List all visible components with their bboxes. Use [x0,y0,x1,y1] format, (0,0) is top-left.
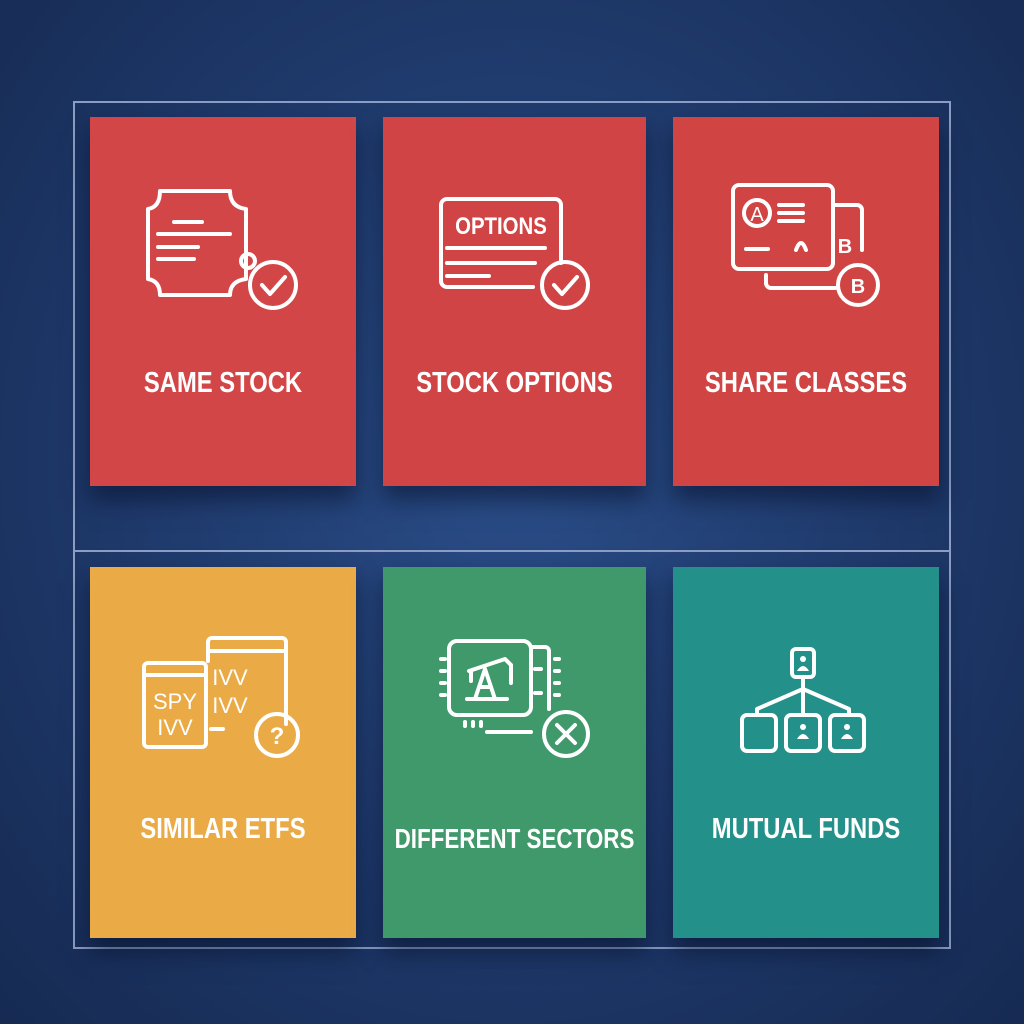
card: stock options [383,117,646,486]
icon: etf windows: IVV [212,693,248,718]
icon: options doc: OPTIONS [455,212,547,239]
icon: share classes A B: B [838,236,852,258]
icon: etf windows: IVV [212,665,248,690]
card: different sectors [383,567,646,938]
label: SHARE CLASSES [705,367,907,399]
icon: options doc [439,197,590,310]
icon: etf windows: ? [270,723,284,750]
icon: share classes A B: A [750,204,764,226]
label: MUTUAL FUNDS [712,813,900,845]
card: mutual funds [673,567,939,938]
frame [73,101,951,949]
card: similar etfs [90,567,356,938]
card: share classes [673,117,939,486]
icon: share classes A B: B [851,276,865,298]
icon: etf windows: SPY [153,689,197,714]
label: SIMILAR ETFS [140,813,306,845]
icon: share classes A B [731,183,880,307]
icon: chip with oil pump and x [439,639,590,758]
icon: etf windows: IVV [157,715,193,740]
label: SAME STOCK [144,367,302,399]
label: DIFFERENT SECTORS [395,823,634,854]
icon: org tree [740,647,866,753]
icon: certificate with check [146,189,298,310]
label: STOCK OPTIONS [416,367,613,399]
icon: etf windows [142,636,300,758]
card: same stock [90,117,356,486]
